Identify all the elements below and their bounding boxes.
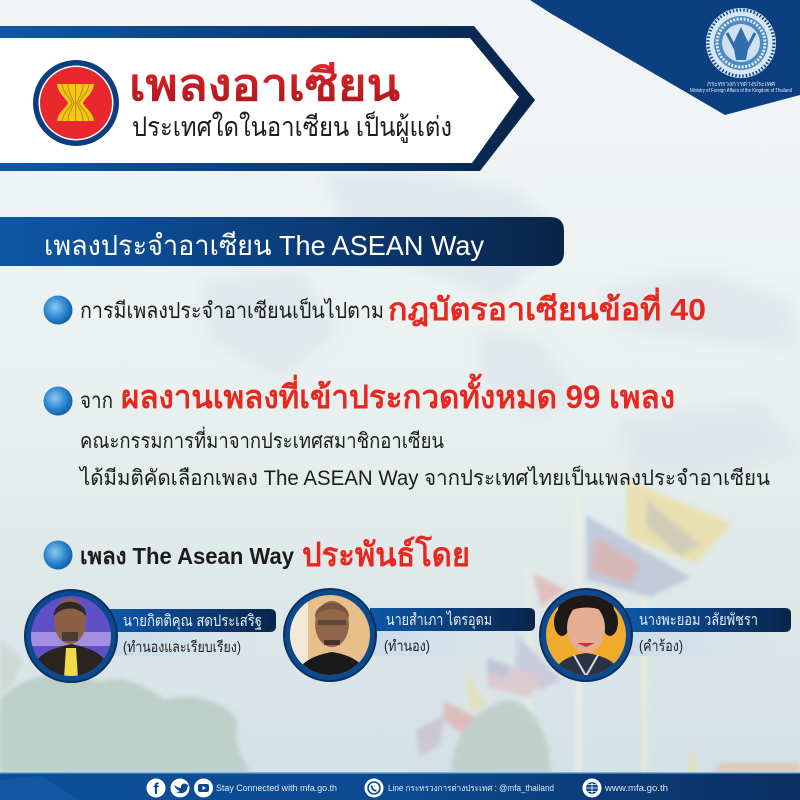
icon: blue orb (44, 296, 72, 324)
point 2 text: จาก (80, 388, 113, 413)
name 2: นายสำเภา ไตรอุดม (386, 610, 492, 630)
icon: youtube (194, 778, 213, 798)
icon: ministry seal (706, 8, 776, 78)
role 3: (คำร้อง) (639, 638, 683, 655)
role 1: (ทำนองและเรียบเรียง) (123, 639, 241, 656)
point 1: ASEAN charter (44, 287, 706, 327)
ministry name: กระทรวงการต่างประเทศ (707, 81, 776, 88)
icon: ASEAN emblem (33, 60, 119, 146)
point 2 text: คณะกรรมการที่มาจากประเทศสมาชิกอาเซียน (80, 426, 444, 453)
point 1 text (80, 287, 706, 327)
role 2: (ทำนอง) (384, 638, 430, 655)
person 2: composer (284, 589, 535, 681)
portrait 2 (290, 595, 370, 675)
point 2 text: ผลงานเพลงที่เข้าประกวดทั้งหมด 99 เพลง (121, 373, 675, 415)
icon: facebook (146, 778, 166, 798)
title banner (0, 26, 535, 171)
subtitle: ประเทศใดในอาเซียน เป็นผู้แต่ง (132, 109, 452, 143)
point 3 text: เพลง The Asean Way (80, 543, 294, 569)
icon: facebook: f (153, 781, 159, 798)
icon: twitter (170, 778, 190, 798)
point 2: 99 songs entered (44, 373, 770, 490)
section heading bar: เพลงประจำอาเซียน The ASEAN Way (44, 230, 484, 261)
point 1 text: กฎบัตรอาเซียนข้อที่ 40 (388, 287, 706, 327)
footer bar (0, 772, 800, 800)
name 3: นางพะยอม วลัยพัชรา (639, 612, 758, 629)
point 3: composers heading (44, 535, 470, 573)
line account label: Line กระทรวงการต่างประเทศ : @mfa_thailand (388, 783, 554, 793)
point 1 text: การมีเพลงประจำอาเซียนเป็นไปตาม (80, 296, 384, 323)
section heading bar (0, 217, 564, 266)
social label: Stay Connected with mfa.go.th (216, 783, 337, 793)
icon: line (364, 778, 384, 798)
name 1: นายกิตติคุณ สดประเสริฐ (123, 613, 262, 631)
point 2 text (78, 373, 770, 490)
person 3: lyricist (540, 588, 791, 681)
point 2 text: ได้มีมติคัดเลือกเพลง The ASEAN Way จากประเทศไทยเป็นเพลงประจำอาเซียน (78, 464, 770, 490)
icon: blue orb (44, 386, 72, 416)
icon: globe (582, 778, 602, 798)
portrait 3 (546, 595, 626, 675)
ministry name (690, 81, 792, 94)
portrait 1 (30, 595, 112, 680)
website label: www.mfa.go.th (604, 783, 668, 793)
icon: blue orb (44, 540, 72, 570)
point 3 text: ประพันธ์โดย (302, 535, 470, 573)
title: เพลงอาเซียน (129, 61, 400, 110)
corner panel: ministry seal (530, 0, 800, 115)
person 1: composer and arranger (25, 590, 276, 682)
point 3 text (80, 535, 470, 573)
